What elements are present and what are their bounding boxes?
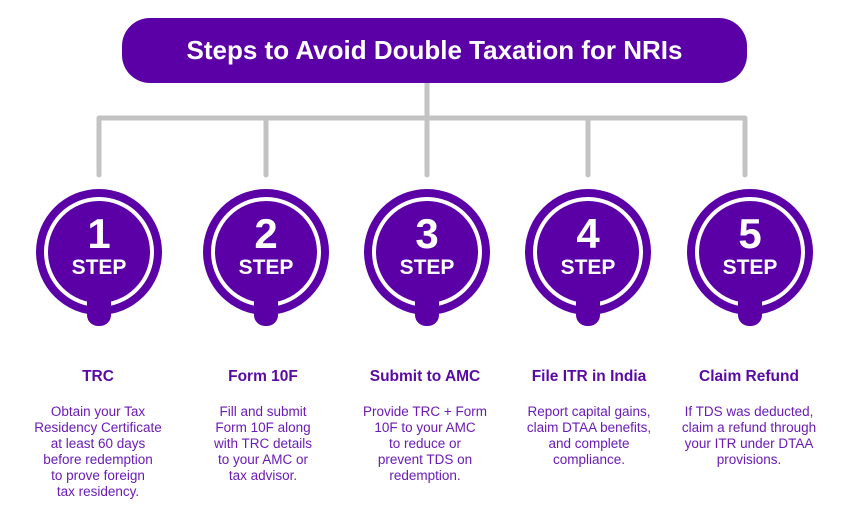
text 2: to your AMC or	[218, 452, 308, 467]
text 2: Fill and submit	[219, 404, 307, 419]
heading 5: Claim Refund	[699, 368, 799, 385]
badge 2: STEP	[239, 256, 293, 279]
text 3	[363, 404, 487, 483]
text 1: tax residency.	[57, 484, 139, 499]
badge 4: 4	[576, 210, 600, 257]
badge 4	[525, 189, 651, 326]
text 1	[34, 404, 162, 499]
text 2	[214, 404, 312, 483]
badge 1: 1	[87, 210, 111, 257]
text 1: to prove foreign	[51, 468, 145, 483]
text 4: claim DTAA benefits,	[527, 420, 651, 435]
text 1: Obtain your Tax	[51, 404, 145, 419]
text 1: at least 60 days	[51, 436, 145, 451]
badge 4: STEP	[561, 256, 615, 279]
text 1: before redemption	[43, 452, 153, 467]
badge 1: STEP	[72, 256, 126, 279]
badge 2: 2	[254, 210, 278, 257]
title: Steps to Avoid Double Taxation for NRIs	[187, 35, 682, 65]
heading 1: TRC	[82, 368, 114, 385]
text 1: Residency Certificate	[34, 420, 162, 435]
heading 2: Form 10F	[228, 368, 298, 385]
text 3: to reduce or	[389, 436, 461, 451]
text 4: and complete	[548, 436, 630, 451]
title	[122, 18, 747, 83]
badge 3	[364, 189, 490, 326]
text 2: tax advisor.	[229, 468, 297, 483]
badge 5: 5	[738, 210, 762, 257]
text 5: provisions.	[717, 452, 781, 467]
badge 3: 3	[415, 210, 439, 257]
badge 3: STEP	[400, 256, 454, 279]
badge 5	[687, 189, 813, 326]
text 5	[682, 404, 816, 467]
text 5: If TDS was deducted,	[685, 404, 813, 419]
text 2: Form 10F along	[215, 420, 311, 435]
text 5: claim a refund through	[682, 420, 816, 435]
text 5: your ITR under DTAA	[685, 436, 813, 451]
heading 4: File ITR in India	[532, 368, 646, 385]
text 3: 10F to your AMC	[374, 420, 476, 435]
badge 1	[36, 189, 162, 326]
text 4	[527, 404, 651, 467]
text 3: prevent TDS on	[378, 452, 472, 467]
text 3: redemption.	[389, 468, 461, 483]
text 2: with TRC details	[214, 436, 312, 451]
text 4: compliance.	[553, 452, 625, 467]
badge 5: STEP	[723, 256, 777, 279]
heading 3: Submit to AMC	[370, 368, 480, 385]
text 3: Provide TRC + Form	[363, 404, 487, 419]
text 4: Report capital gains,	[527, 404, 651, 419]
badge 2	[203, 189, 329, 326]
